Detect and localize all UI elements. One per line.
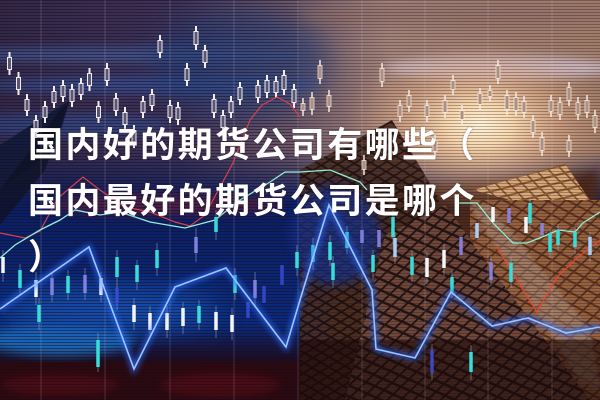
- red trend line: upper left: [0, 97, 300, 238]
- building: tiled slope: [345, 205, 590, 400]
- title line 1: 国内好的期货公司有哪些（: [28, 126, 477, 165]
- glowing blue polyline: [0, 205, 600, 369]
- blue candles: [117, 265, 432, 373]
- white candles: [3, 207, 526, 332]
- outlined candlesticks: upper left: [10, 26, 294, 148]
- red trend line: lower right: [497, 240, 600, 312]
- light-blue candles: [395, 223, 590, 257]
- outlined candlesticks: upper right: [303, 60, 595, 175]
- title line 2: 国内最好的期货公司是哪个: [28, 182, 477, 221]
- title: [28, 126, 477, 277]
- building: right side facade: [470, 200, 600, 400]
- building: bright tiled roof: [473, 164, 590, 200]
- title line 3: ）: [28, 238, 65, 277]
- candle wicks: [3, 198, 590, 380]
- cyan candles: [20, 203, 575, 372]
- lavender candles: [52, 208, 542, 298]
- solid candlesticks: [3, 203, 590, 373]
- building: dark tower facade: [300, 120, 440, 400]
- teal trend line: [0, 170, 600, 258]
